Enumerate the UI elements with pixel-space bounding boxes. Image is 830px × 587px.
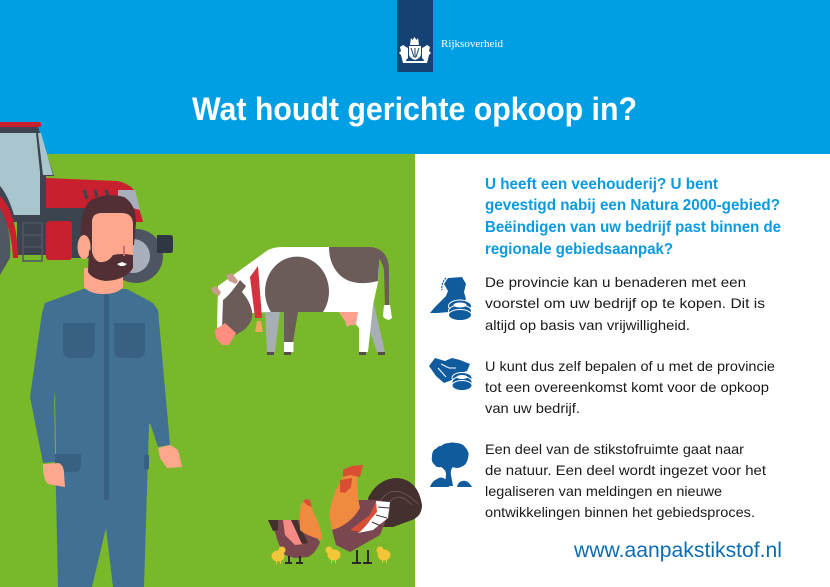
head [222, 280, 252, 337]
front wheel [109, 229, 163, 283]
hands [43, 463, 65, 487]
title: Wat houdt gerichte opkoop in? [192, 91, 637, 127]
coverall [30, 289, 170, 587]
header band [0, 0, 830, 154]
intro question heading: gevestigd nabij een Natura 2000-gebied? [485, 197, 780, 214]
logo: Rijksoverheid: Rijksoverheid [441, 38, 503, 50]
text: own decision [485, 358, 775, 416]
green field panel [0, 154, 415, 587]
far legs [265, 308, 280, 352]
white text panel [415, 154, 830, 587]
icon: handshake with coins [429, 358, 472, 390]
arch and rear wheel [0, 196, 18, 258]
hooves [267, 352, 385, 355]
collar and bell [250, 266, 262, 318]
windows [0, 133, 40, 215]
text: nitrogen space: ontwikkelingen binnen het gebiedsproces. [485, 504, 755, 520]
neck [84, 268, 123, 294]
intro question heading: Beëindigen van uw bedrijf past binnen de [485, 219, 781, 236]
muzzle [215, 323, 236, 345]
face [92, 213, 133, 270]
chest pockets [63, 323, 95, 358]
text: nitrogen space: de natuur. Een deel wordt ingezet voor het [485, 462, 766, 478]
hen [268, 520, 320, 558]
intro question heading: regionale gebiedsaanpak? [485, 241, 673, 258]
text: province approach [485, 274, 765, 333]
icon: Netherlands map with coins [430, 277, 472, 320]
udder [339, 312, 358, 327]
text: nitrogen space [485, 441, 766, 520]
horns [211, 273, 238, 296]
text: own decision: tot een overeenkomst komt voor de opkoop [485, 379, 769, 395]
spots [265, 257, 329, 342]
illustration: farmer [30, 195, 182, 587]
text: own decision: U kunt dus zelf bepalen of u met de provincie [485, 358, 775, 374]
intro question heading: U heeft een veehouderij? U bent [485, 176, 718, 193]
hair [81, 195, 136, 245]
beard [88, 250, 133, 281]
illustration: tractor [0, 122, 173, 283]
rooster body [332, 500, 390, 552]
intro question heading [485, 176, 781, 258]
website link: www.aanpakstikstof.nl [573, 539, 782, 562]
ladder [23, 223, 42, 261]
roof [0, 122, 41, 127]
text: nitrogen space: legaliseren van meldingen en nieuwe [485, 483, 722, 499]
logo: Rijksoverheid [397, 0, 503, 72]
rooster tail [368, 478, 422, 527]
hood [46, 178, 143, 222]
icon: tree [430, 442, 472, 487]
body [217, 247, 379, 352]
legs [288, 550, 369, 563]
text: province approach: voorstel om uw bedrijf op te kopen. Dit is [485, 295, 765, 311]
illustration: cow [211, 247, 392, 355]
text: province approach: altijd op basis van vrijwilligheid. [485, 317, 690, 333]
tail [372, 247, 389, 306]
text: province approach: De provincie kan u benaderen met een [485, 274, 746, 290]
text: nitrogen space: Een deel van de stikstofruimte gaat naar [485, 441, 744, 457]
cab frame [0, 127, 54, 222]
ear [78, 235, 90, 259]
chicks [272, 546, 390, 564]
illustration: chickens [268, 465, 422, 564]
text: own decision: van uw bedrijf. [485, 400, 580, 416]
